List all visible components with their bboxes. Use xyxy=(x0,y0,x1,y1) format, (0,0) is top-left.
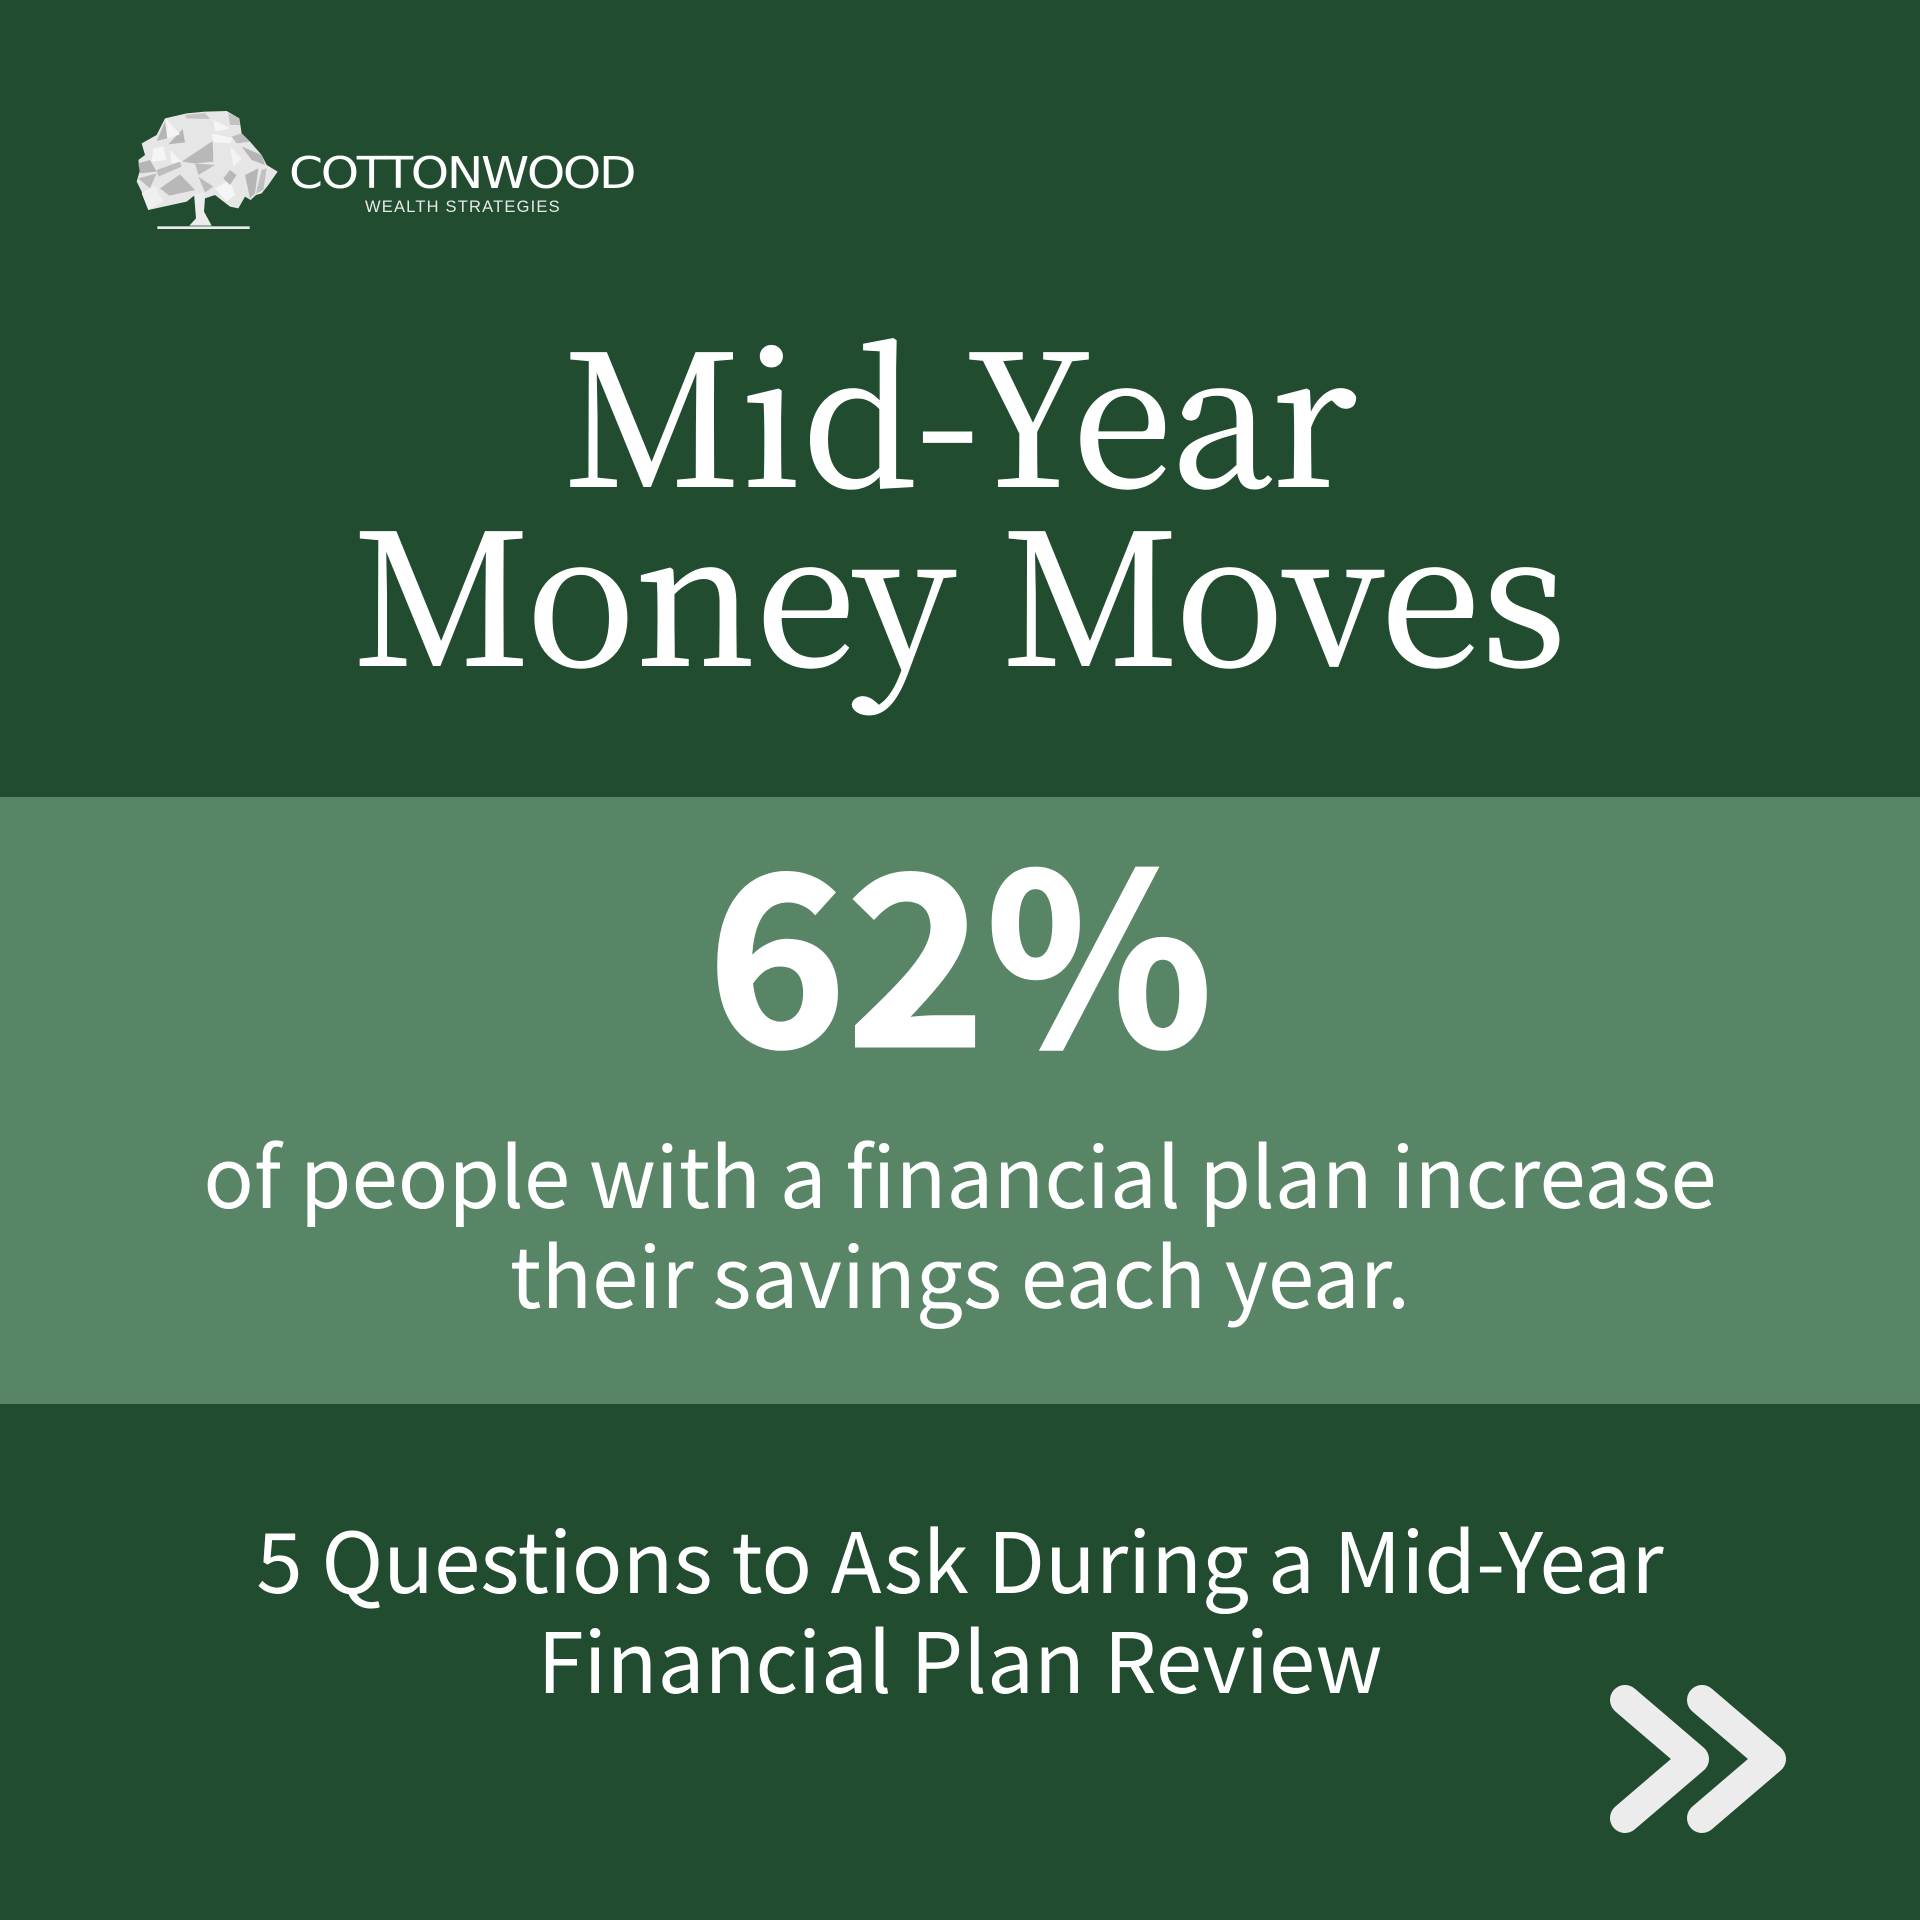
statistic description: their savings each year. xyxy=(510,1212,1410,1333)
tagline: WEALTH STRATEGIES xyxy=(365,198,561,216)
panel: lighter green statistic band xyxy=(0,797,1920,1404)
icon: double chevron arrow xyxy=(1610,1685,1786,1833)
title: Mid-Year xyxy=(564,277,1356,539)
subheading: review questions: 5 Questions to Ask During a Mid-Year xyxy=(256,1497,1664,1618)
subheading: review questions: Financial Plan Review xyxy=(537,1597,1383,1718)
wordmark: COTTONWOOD xyxy=(289,147,634,198)
statistic: 62%: 62% xyxy=(707,772,1213,1114)
logo: Cottonwood Wealth Strategies xyxy=(136,111,634,229)
title xyxy=(353,277,1567,718)
statistic description xyxy=(203,1112,1717,1333)
tree trunk and ground line xyxy=(157,193,250,229)
icon: low-poly tree xyxy=(136,111,278,229)
statistic description: of people with a financial plan increase xyxy=(203,1112,1717,1233)
subheading: review questions xyxy=(256,1497,1664,1718)
title: Money Moves xyxy=(353,456,1567,718)
